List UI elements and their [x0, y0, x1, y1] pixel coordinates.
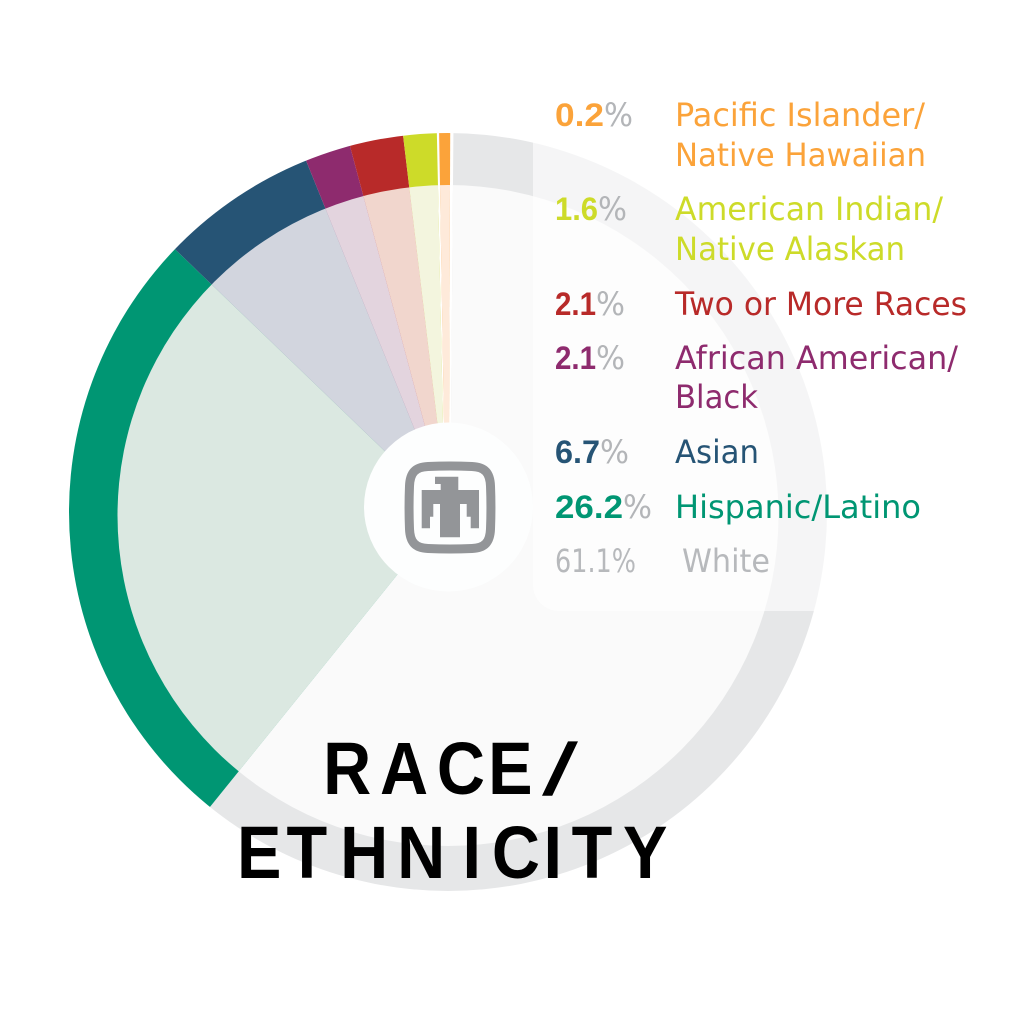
title	[237, 727, 667, 894]
pie inner tinted wedges	[118, 185, 764, 846]
wedge: Hispanic/Latino	[118, 284, 398, 772]
legend row: American Indian/Native Alaskan	[555, 190, 943, 268]
wedge: Pacific Islander/Native Hawaiian	[440, 185, 450, 423]
legend row: Pacific Islander/Native Hawaiian: Native Hawaiian	[675, 136, 926, 174]
ring segment: Hispanic/Latino	[69, 249, 398, 807]
title: RACE	[323, 727, 532, 810]
legend row: Hispanic/Latino: Hispanic/Latino	[675, 488, 921, 526]
legend row: Two or More Races: 2.1	[555, 286, 596, 322]
donut chart outer ring	[69, 133, 826, 891]
legend row: Hispanic/Latino: 26.2	[555, 489, 623, 525]
legend row: Asian: 6.7	[555, 434, 600, 470]
legend row: African American/Black	[555, 339, 958, 416]
wedge: African American/Black	[326, 196, 425, 430]
legend row: White: White	[682, 542, 770, 580]
legend backing panel	[533, 0, 1024, 611]
wedge: Two or More Races	[364, 187, 438, 426]
legend row: Two or More Races: %	[596, 285, 625, 323]
icon: thunderbird logo	[409, 466, 491, 549]
legend row: White	[555, 542, 770, 580]
legend row: Pacific Islander/Native Hawaiian: Pacific Islander/	[675, 96, 925, 134]
legend	[555, 96, 967, 580]
legend row: American Indian/Native Alaskan: American Indian/	[675, 190, 943, 228]
legend row: Pacific Islander/Native Hawaiian: 0.2	[555, 97, 604, 133]
legend row: African American/Black: Black	[675, 378, 758, 416]
legend row: African American/Black: 2.1	[555, 340, 596, 376]
ring segment: Asian	[175, 160, 414, 450]
wedge: American Indian/Native Alaskan	[409, 185, 443, 424]
legend row: African American/Black: African American/	[675, 339, 958, 377]
ring segment: Two or More Races	[350, 136, 438, 426]
center white circle	[364, 422, 533, 592]
legend row: Pacific Islander/Native Hawaiian	[555, 96, 926, 174]
legend row: American Indian/Native Alaskan: Native Alaskan	[675, 230, 905, 268]
legend row: Pacific Islander/Native Hawaiian: %	[604, 96, 633, 134]
wedge: White	[238, 185, 764, 846]
title: /	[542, 729, 579, 811]
legend row: American Indian/Native Alaskan: %	[598, 190, 627, 228]
legend row: Two or More Races	[555, 285, 967, 323]
wedge: Asian	[212, 208, 414, 452]
legend row: Hispanic/Latino: %	[623, 488, 652, 526]
legend row: White: 61.1%	[555, 542, 636, 580]
legend row: American Indian/Native Alaskan: 1.6	[555, 191, 598, 227]
legend row: Two or More Races: Two or More Races	[674, 285, 967, 323]
ring segment: American Indian/Native Alaskan	[403, 133, 443, 422]
title: ETHNICITY	[237, 811, 667, 894]
legend row: Asian: Asian	[675, 433, 759, 471]
legend row: Asian: %	[600, 433, 629, 471]
ring segment: White	[210, 133, 826, 891]
ring segment: Pacific Islander/Native Hawaiian	[439, 133, 450, 422]
legend row: Asian	[555, 433, 759, 471]
ring segment: African American/Black	[306, 146, 425, 430]
legend row: Hispanic/Latino	[555, 488, 921, 526]
legend row: African American/Black: %	[596, 339, 625, 377]
